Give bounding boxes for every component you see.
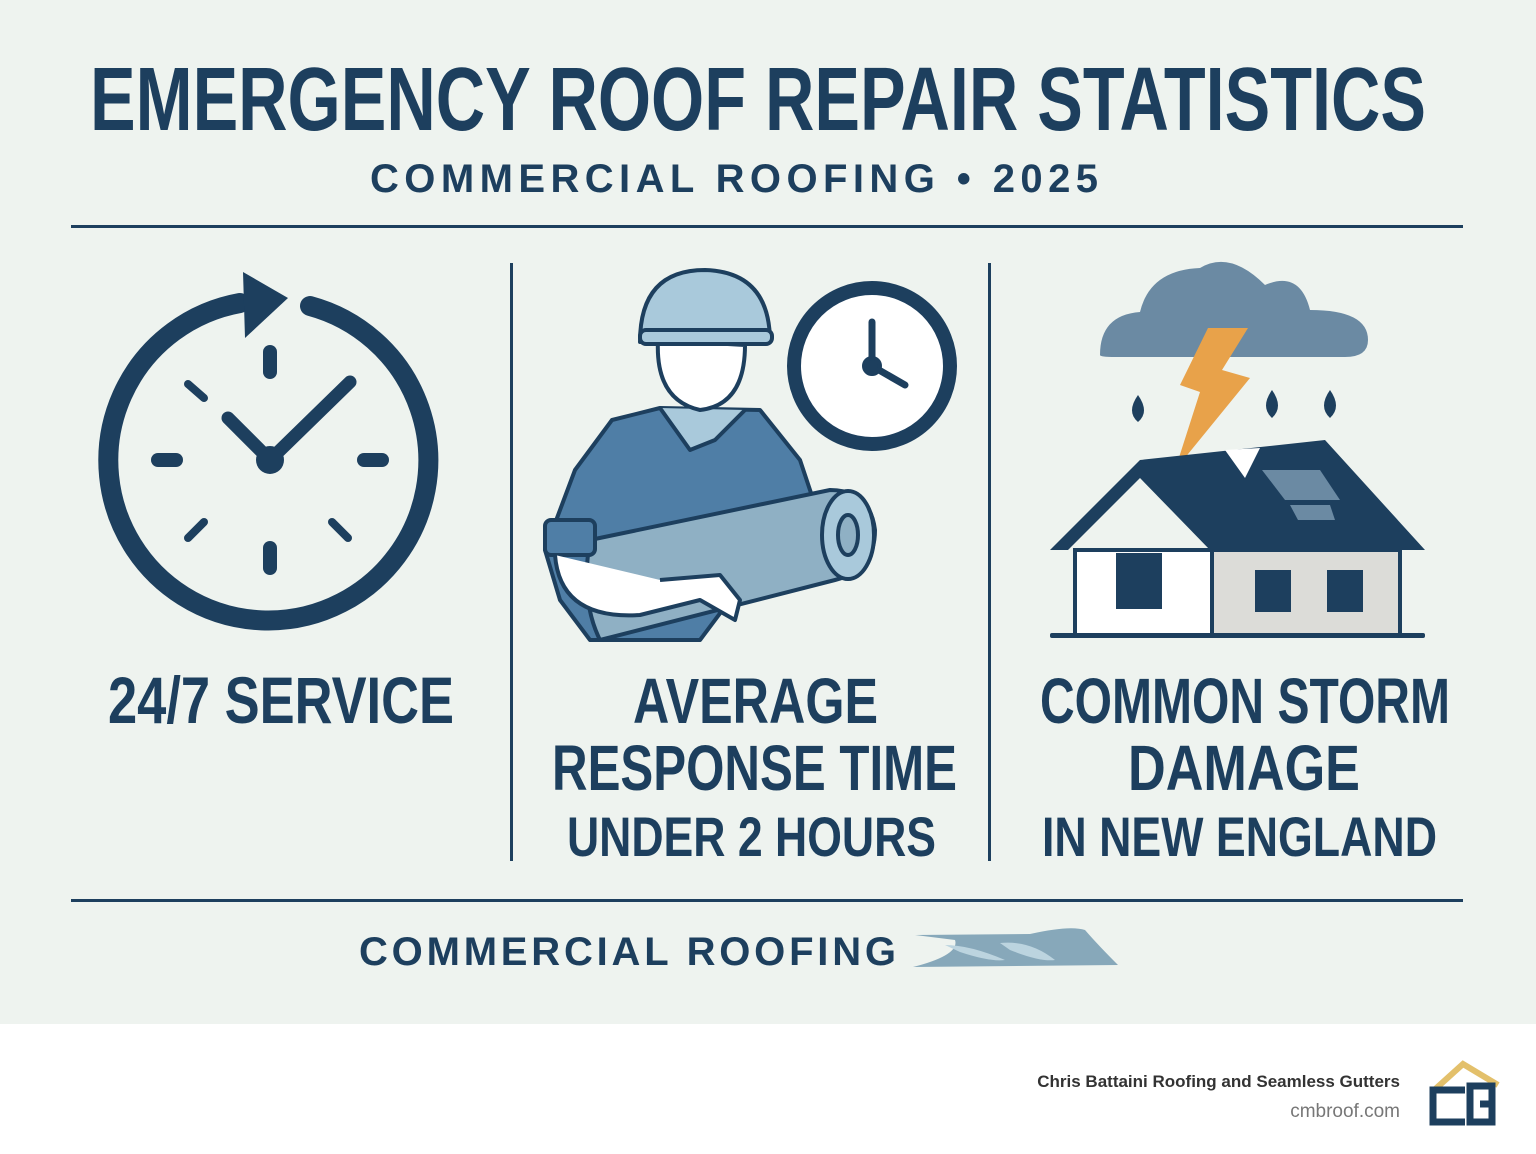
label: 24/7 service: 24/7 SERVICE bbox=[108, 663, 454, 737]
label: common storm damage: IN NEW ENGLAND bbox=[1042, 805, 1437, 868]
label: common storm damage bbox=[1040, 665, 1450, 868]
label: average response time: RESPONSE TIME bbox=[552, 732, 957, 804]
label: average response time: AVERAGE bbox=[633, 665, 878, 737]
label: common storm damage: DAMAGE bbox=[1128, 732, 1360, 804]
label: average response time bbox=[552, 665, 957, 868]
label: average response time: UNDER 2 HOURS bbox=[567, 805, 936, 868]
icon: roof wave bbox=[913, 928, 1118, 967]
company name: Chris Battaini Roofing and Seamless Gutters bbox=[1037, 1072, 1400, 1091]
icon: worker with clock bbox=[545, 270, 950, 640]
logo bbox=[1432, 1064, 1498, 1122]
website: cmbroof.com bbox=[1290, 1101, 1400, 1122]
icon: 24/7 clock bbox=[108, 272, 428, 620]
icon: storm house bbox=[1050, 262, 1425, 638]
footer label: COMMERCIAL ROOFING bbox=[359, 930, 896, 974]
subtitle: COMMERCIAL ROOFING • 2025 bbox=[370, 157, 1098, 201]
